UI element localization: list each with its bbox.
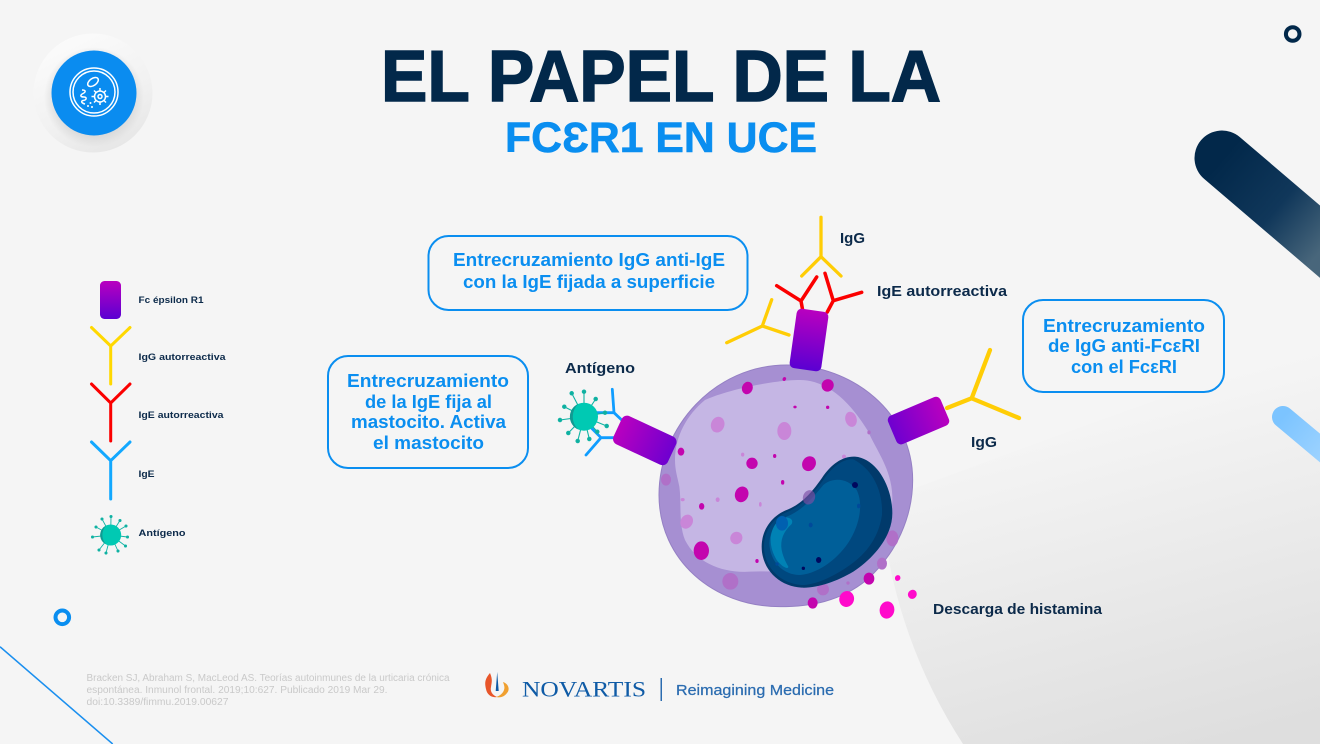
label: Descarga de histamina: Descarga de histamina	[933, 601, 1103, 618]
receptor right	[886, 395, 951, 446]
legend: Fc epsilon R1	[100, 281, 204, 319]
right receptor with IgG	[886, 350, 1019, 446]
cell outer membrane	[659, 365, 913, 607]
callout: IgE mastocito: de la IgE fija al	[365, 392, 492, 412]
decorative ring bottom left	[56, 610, 69, 624]
reference text: espontánea. Inmunol frontal. 2019;10:627. Publicado 2019 Mar 29.	[86, 685, 388, 696]
legend: Antigen	[91, 515, 186, 554]
yellow antibody right	[947, 350, 1019, 418]
yellow antibody top	[802, 217, 841, 276]
callout: IgE mastocito: Entrecruzamiento	[347, 371, 509, 391]
decorative ring top right	[1286, 27, 1299, 41]
top receptor with antibodies	[727, 217, 862, 372]
icon: petri dish badge	[34, 34, 152, 152]
legend: IgE: IgE	[138, 469, 154, 480]
reference text: Bracken SJ, Abraham S, MacLeod AS. Teorías autoinmunes de la urticaria crónica	[86, 673, 450, 684]
logo tagline: Reimagining Medicine	[676, 682, 834, 699]
label: IgG right: IgG	[971, 434, 997, 451]
decorative dark band	[1222, 158, 1320, 263]
logo flame	[485, 672, 509, 697]
antigen	[558, 390, 608, 443]
logo wordmark: NOVARTIS	[522, 676, 646, 702]
legend: IgE	[92, 442, 154, 499]
legend: IgG autorreactiva: IgG autorreactiva	[138, 352, 226, 363]
callout: IgG anti-IgE	[428, 236, 748, 310]
callout: IgG anti-FceRI: con el FcεRI	[1071, 357, 1177, 377]
reference text	[86, 673, 450, 708]
cell cytoplasm	[675, 380, 892, 572]
callout: IgG anti-FceRI: de IgG anti-FcεRI	[1048, 336, 1200, 356]
Novartis logo	[485, 672, 834, 702]
legend: Antigen: Antígeno	[138, 528, 186, 539]
receptor left	[611, 414, 679, 467]
callout: IgG anti-FceRI: Entrecruzamiento	[1043, 316, 1205, 336]
legend: IgE autorreactiva: IgE autorreactiva	[138, 410, 224, 421]
title line 1: EL PAPEL DE LA	[381, 37, 941, 117]
callout: IgE mastocito	[328, 356, 528, 468]
legend	[91, 281, 226, 554]
title line 2: FCƐR1 EN UCE	[505, 114, 817, 162]
callout: IgG anti-IgE: con la IgE fijada a superficie	[463, 272, 715, 292]
legend: IgE autorreactiva	[92, 384, 224, 441]
red antibodies	[777, 273, 862, 312]
histamine release particles	[837, 574, 918, 620]
receptor top	[789, 308, 829, 372]
callout: IgE mastocito: mastocito. Activa	[351, 412, 507, 432]
decorative diagonal line	[0, 647, 113, 744]
dark granules	[678, 376, 874, 609]
label: IgG top: IgG	[840, 230, 865, 247]
background curved shape	[882, 340, 1320, 744]
reference text: doi:10.3389/fimmu.2019.00627	[86, 697, 229, 708]
mast cell	[659, 365, 918, 620]
nucleus	[762, 457, 892, 588]
callout: IgG anti-FceRI	[1023, 300, 1224, 392]
title	[381, 37, 941, 162]
membrane granules	[661, 430, 898, 595]
blue antibodies	[586, 389, 622, 455]
callout: IgG anti-IgE: Entrecruzamiento IgG anti-IgE	[453, 250, 725, 270]
decorative light blue band	[1283, 417, 1320, 469]
left receptor with antigen	[558, 389, 679, 467]
legend: Fc epsilon R1: Fc épsilon R1	[138, 295, 204, 306]
label: IgE autorreactiva: IgE autorreactiva	[877, 283, 1008, 300]
logo divider	[660, 678, 662, 701]
pale granules	[678, 410, 858, 546]
callout: IgE mastocito: el mastocito	[373, 433, 484, 453]
yellow antibody left	[727, 300, 789, 343]
label: Antigeno: Antígeno	[565, 360, 635, 377]
legend: IgG autorreactiva	[92, 328, 226, 384]
